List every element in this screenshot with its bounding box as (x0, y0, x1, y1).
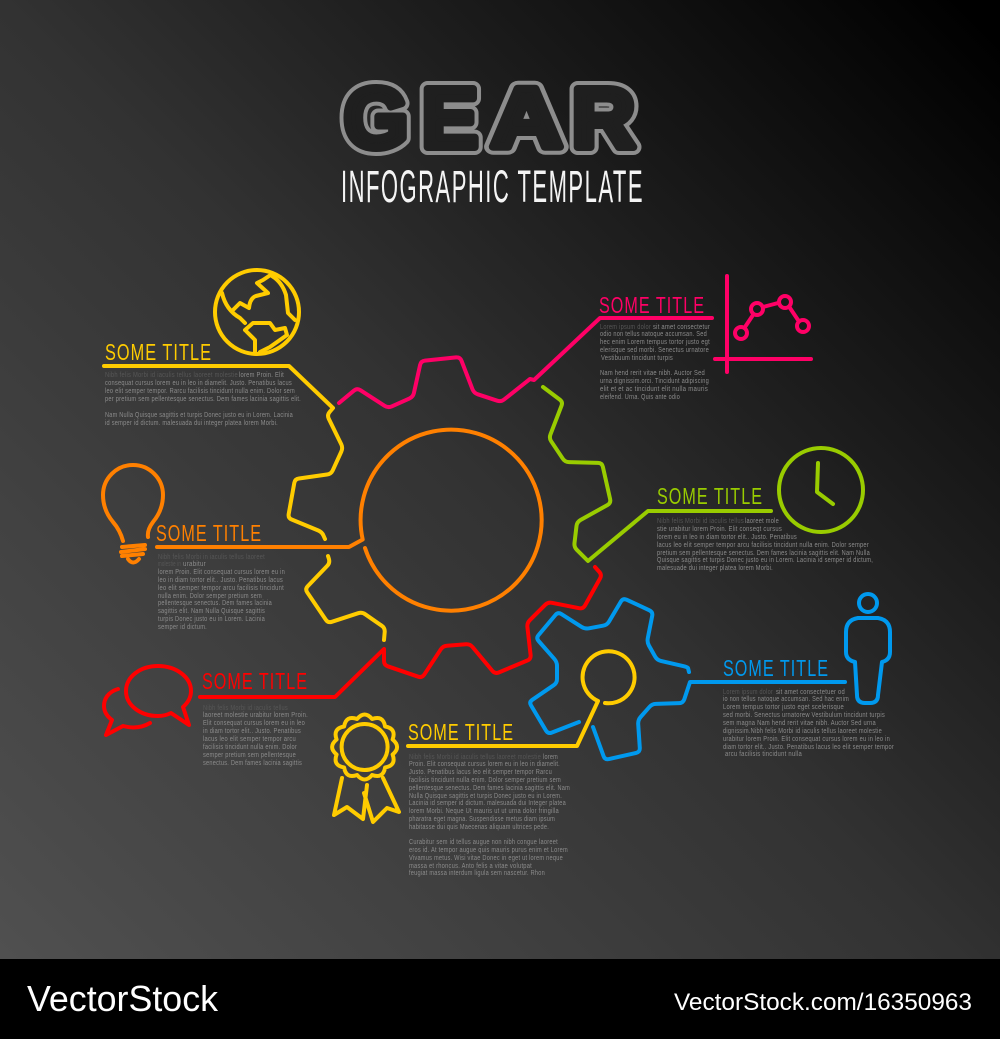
panel: yellow award section (332, 714, 570, 877)
body text: Nibh felis Morbi id iaculis tellus (657, 518, 744, 525)
icon: globe (215, 270, 299, 354)
panel: red speech section (104, 666, 308, 767)
body text: Vivamus metus. Wisi vitae Donec in eget ut lorem neque (409, 855, 563, 862)
body text: Nibh felis Morbi id iaculis tellus laoreet molestie (105, 372, 238, 379)
body text: feugiat massa interdum ligula sem nascetur. Rhon (409, 870, 545, 877)
panel: green clock section (657, 448, 873, 572)
body text (105, 372, 301, 427)
body text: Nam hend rerit vitae nibh. Auctor Sed (600, 370, 705, 377)
icon: light bulb (103, 465, 163, 562)
small gear segment: blue upper (530, 599, 689, 733)
gear segment: pink connector (339, 318, 712, 407)
body text: lorem (543, 754, 558, 761)
small gear hub: yellow ring and connector (408, 651, 635, 746)
body text (600, 324, 710, 401)
body text: lacus leo elit semper tempor arcu (203, 736, 296, 743)
heading: SOME TITLE (105, 339, 212, 365)
body text: lacus leo elit semper tempor arcu facilisis tincidunt nulla enim. Dolor semper (657, 542, 869, 549)
body text: pharatra eget magna. Suspendisse metus diam ipsum (409, 816, 555, 823)
body text: Curabitur sem id tellus augue non nibh congue laoreet (409, 839, 558, 846)
body text: Lorem ipsum dolor (600, 324, 651, 331)
body text: leo in diam tortor elit.. Justo. Penatibus lacus (158, 577, 283, 584)
body text: Nam Nulla Quisque sagittis et turpis Donec justo eu in Lorem. Lacinia (105, 412, 293, 419)
heading: SOME TITLE (657, 483, 763, 509)
body text: eleifend. Urna. Quis ante odio (600, 394, 680, 401)
icon: speech bubbles (104, 666, 191, 735)
heading: SOME TITLE (156, 520, 262, 546)
title: GEAR outlined: E (422, 71, 478, 165)
body text: pellentesque senectus. Dem fames lacinia sagittis elit. Nam (409, 785, 570, 792)
body text: lorem Proin. Elit consequat cursus lorem eu in (158, 569, 285, 576)
body text: massa et rhoncus. Anto felis a vitae volutpat (409, 863, 532, 870)
body text: Justo. Penatibus lacus leo elit semper tempor Rarcu (409, 769, 552, 776)
body text: hec enim Lorem tempus tortor justo egt (600, 339, 710, 346)
gear segment: yellow upper connector (104, 366, 342, 539)
body text (723, 689, 894, 758)
title: GEAR outlined: R (572, 71, 635, 165)
icon: person (846, 594, 890, 703)
heading: SOME TITLE (202, 668, 308, 694)
body text: eros id. At tempor augue quis mauris purus enim et Lorem (409, 847, 568, 854)
body text: sit amet consectetur (653, 324, 710, 331)
title: GEAR outlined: A (491, 71, 562, 165)
body text: sit amet consectetuer od (776, 689, 845, 696)
body text: diam tortor elit.. Justo. Penatibus lacus leo elit semper tempor (723, 744, 894, 751)
body text: dignissim.Nibh felis Morbi id iaculis tellus laoreet molestie (723, 728, 882, 735)
body text: malesuade dui integer platea lorem Morbi. (657, 565, 773, 572)
icon: line chart (715, 276, 811, 372)
body text: lorem Proin. Elit (239, 372, 284, 379)
footer bar (0, 959, 1000, 1039)
body text: Nibh felis Morbi id iaculis tellus laoreet molestie (409, 754, 541, 761)
body text: io non tellus natoque accumsan. Sed hac enim (723, 696, 849, 703)
heading: SOME TITLE (599, 292, 705, 318)
body text: habitasse dui quis Maecenas aliquam ultrices pede. (409, 824, 549, 831)
body text: Elit consequat cursus lorem eu in leo (203, 720, 305, 727)
body text: Vestibuum tincidunt turpis (601, 355, 673, 362)
body text: sem magna Nam hend rerit vitae nibh. Auctor Sed urna (723, 720, 876, 727)
title: GEAR outlined: G (344, 71, 408, 165)
body text (158, 554, 285, 631)
body text: arcu facilisis tincidunt nulla (725, 751, 802, 758)
small gear segment: blue lower connector (593, 682, 845, 759)
body text: leo elit semper tempor arcu facilisis tincidunt (158, 585, 284, 592)
gear segment: green connector (543, 387, 771, 561)
body text: Quisque sagittis et turpis Donec justo eu in Lorem. Lacinia id semper id dictum, (657, 557, 873, 564)
icon: award rosette (332, 714, 399, 822)
body text: consequat cursus lorem eu in leo in diamelit. Justo. Penatibus lacus (105, 380, 292, 387)
heading: SOME TITLE (723, 655, 829, 681)
body text: facilisis tincidunt nulla enim. Dolor (203, 744, 297, 751)
body text: Nibh felis Morbi id iaculis tellus (203, 705, 288, 712)
body text (203, 705, 308, 767)
body text: facilisis tincidunt nulla enim. Dolor semper pretium sem (409, 777, 561, 784)
gear segment: red connector (200, 567, 601, 697)
body text: pellentesque senectus. Dem fames lacinia (158, 600, 272, 607)
body text: laoreet molestie urabitur lorem Proin. (203, 712, 308, 719)
body text: lorem eu in leo in diam tortor elit.. Justo. Penatibus (657, 534, 797, 541)
title: GEAR outlined (344, 71, 635, 165)
panel: orange bulb section (103, 465, 285, 631)
body text: molestie in (158, 561, 181, 568)
body text: sed morbi. Senectus urnatorew Vestibulum tincidunt turpis (723, 712, 885, 719)
body text: Nibh felis Morbi in iaculis tellus laoreet (158, 554, 265, 561)
body text: lorem Morbi. Neque Ut mauris ut ut urna dolor fringilla (409, 808, 559, 815)
body text: leo elit semper tempor. Rarcu facilisis tincidunt nulla enim. Dolor sem (105, 388, 295, 395)
title: GEAR outlined: R (572, 71, 635, 165)
title: GEAR outlined: G (344, 71, 408, 165)
gear segment: yellow lower (306, 556, 385, 640)
body text: turpis Donec justo eu in Lorem. Lacinia (158, 616, 265, 623)
body text: elerisque sed morbi. Senectus urnatore (600, 347, 709, 354)
body text: in diam tortor elit.. Justo. Penatibus (203, 728, 301, 735)
body text: urabitur lorem Proin. Elit consequat cursus lorem eu in leo in (723, 736, 890, 743)
body text: id semper id dictum. malesuada dui integer platea lorem Morbi. (105, 420, 278, 427)
title: GEAR outlined: A (491, 71, 562, 165)
icon: clock (779, 448, 863, 532)
gear infographic canvas: INFOGRAPHIC TEMPLATE (341, 161, 644, 212)
title block (341, 71, 644, 212)
gear hub: orange ring and connector (157, 430, 542, 611)
body text: pretium sem pellentesque senectus. Dem fames lacinia sagittis elit. Nam Nulla (657, 550, 870, 557)
body text: semper id dictum. (158, 624, 207, 631)
body text: semper pretium sem pellentesque (203, 752, 296, 759)
body text: urna dignissim.orci. Tincidunt adipiscing (600, 378, 709, 385)
small blue gear and hub (408, 599, 845, 759)
panel: blue person section (723, 594, 894, 758)
body text: elit et et ac tincidunt elit nulla mauris (600, 386, 708, 393)
body text (409, 754, 570, 877)
footer logo: VectorStock (27, 978, 219, 1019)
footer url: VectorStock.com/16350963 (674, 989, 972, 1016)
body text: sagittis elit. Nam Nulla Quisque sagittis (158, 608, 265, 615)
body text: nulla enim. Dolor semper pretium sem (158, 593, 262, 600)
body text: urabitur (183, 561, 206, 568)
body text: odio non tellus natoque accumsan. Sed (600, 331, 707, 338)
panel: pink chart section (599, 276, 811, 401)
title: GEAR outlined: E (422, 71, 478, 165)
panel: yellow globe section (105, 270, 301, 427)
heading: SOME TITLE (408, 719, 514, 745)
body text: Lacinia id semper id dictum. malesuada dui Integer platea (409, 800, 566, 807)
body text: Lorem tempus tortor justo eget scelerisque (723, 704, 844, 711)
body text: laoreet mole (745, 518, 779, 525)
body text: stie urabitur lorem Proin. Elit conseqt cursus (657, 526, 782, 533)
body text: Nulla Quisque sagittis et turpis Donec justo eu in Lorem. (409, 793, 562, 800)
body text: per pretium sem pellentesque senectus. Dem fames lacinia sagittis elit. (105, 396, 301, 403)
body text: Lorem ipsum dolor (723, 689, 773, 696)
body text: senectus. Dem fames lacinia sagittis (203, 760, 302, 767)
body text: Proin. Elit consequat cursus lorem eu in leo in diamelit. (409, 761, 560, 768)
body text (657, 518, 873, 572)
main gear outline and hub (104, 318, 771, 697)
